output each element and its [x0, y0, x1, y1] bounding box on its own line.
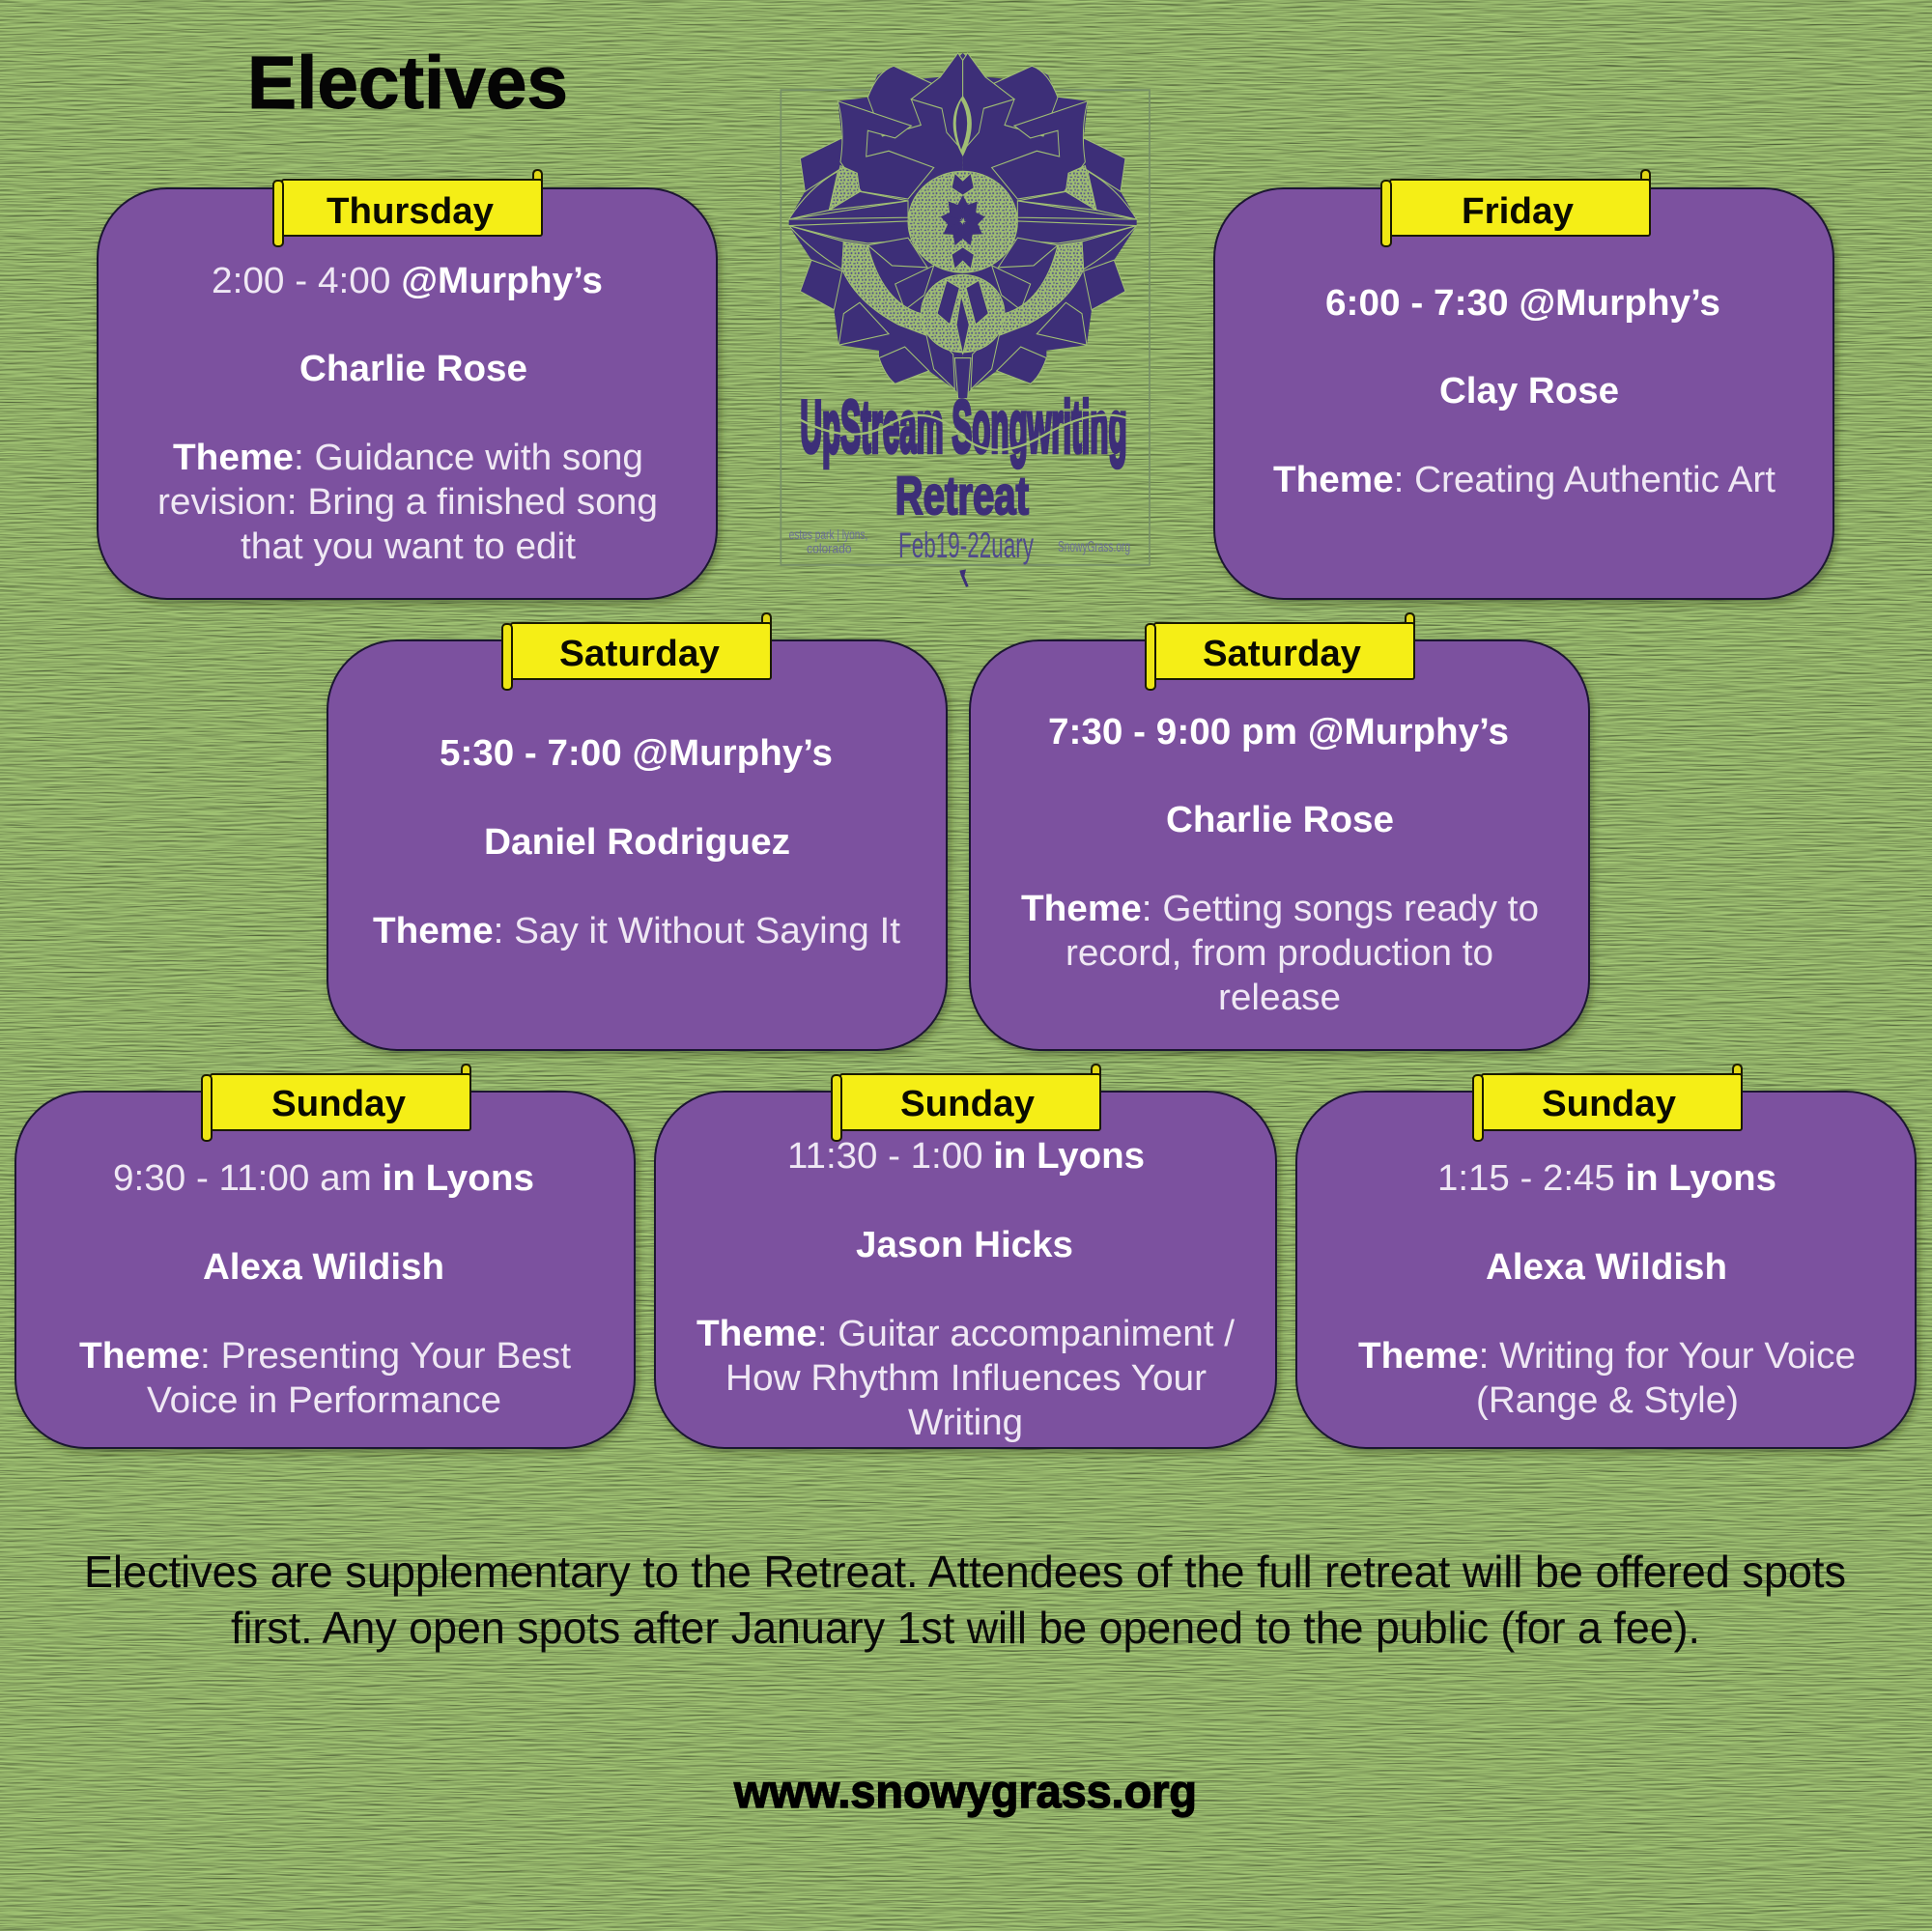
panel: Sunday 11:30: [655, 1065, 1276, 1448]
logo: UpStream Songwriting Retreat poster: colorado: [807, 541, 852, 556]
theme: Theme: Say it Without Saying It: [373, 911, 900, 951]
theme: Theme: Creating Authentic Art: [1273, 460, 1776, 500]
theme: How Rhythm Influences Your: [725, 1358, 1207, 1399]
theme: Theme: Writing for Your Voice: [1358, 1336, 1856, 1377]
theme: [79, 1336, 571, 1421]
instructor: Alexa Wildish: [1486, 1247, 1727, 1288]
tag: Saturday: Saturday: [559, 633, 721, 674]
note text: [84, 1547, 1846, 1653]
tag: Saturday: [1146, 613, 1414, 690]
instructor: Jason Hicks: [856, 1225, 1073, 1265]
theme: release: [1218, 978, 1341, 1018]
theme: record, from production to: [1065, 933, 1493, 974]
theme: Theme: Presenting Your Best: [79, 1336, 571, 1377]
theme: [1021, 889, 1539, 1018]
instructor: Charlie Rose: [1166, 800, 1394, 840]
logo: UpStream Songwriting Retreat poster: Retreat: [895, 467, 1029, 526]
theme: [696, 1314, 1235, 1443]
tag: Thursday: Thursday: [327, 190, 495, 232]
theme: Theme: Getting songs ready to: [1021, 889, 1539, 929]
time: 11:30 - 1:00 in Lyons: [787, 1136, 1145, 1177]
theme: [1358, 1336, 1856, 1421]
instructor: Alexa Wildish: [203, 1247, 444, 1288]
time: 2:00 - 4:00 @Murphy’s: [212, 261, 603, 301]
time: 9:30 - 11:00 am in Lyons: [113, 1158, 534, 1199]
theme: Voice in Performance: [147, 1380, 501, 1421]
theme: that you want to edit: [241, 526, 576, 567]
website url: www.snowygrass.org: [733, 1767, 1197, 1818]
panel: Friday: [1214, 170, 1833, 599]
instructor: Daniel Rodriguez: [484, 822, 790, 863]
instructor: Clay Rose: [1439, 371, 1619, 412]
tag: Thursday: [273, 170, 542, 246]
logo: UpStream Songwriting Retreat poster: Feb19-22uary: [898, 526, 1035, 566]
tag: Friday: [1381, 170, 1650, 246]
tag: Saturday: [502, 613, 771, 690]
note text: first. Any open spots after January 1st will be opened to the public (for a fee).: [231, 1603, 1700, 1653]
theme: (Range & Style): [1476, 1380, 1739, 1421]
panel: Saturday 5:30: [327, 613, 947, 1050]
logo: UpStream Songwriting Retreat poster: [781, 52, 1151, 587]
panel: Thursday: [98, 170, 717, 599]
time: 5:30 - 7:00 @Murphy’s: [440, 733, 833, 774]
note text: Electives are supplementary to the Retreat. Attendees of the full retreat will be offered spots: [84, 1547, 1846, 1597]
time: 6:00 - 7:30 @Murphy’s: [1325, 283, 1720, 324]
instructor: Charlie Rose: [299, 349, 527, 389]
panel: Sunday 1:15: [1296, 1065, 1916, 1448]
tag: Sunday: Sunday: [900, 1083, 1036, 1124]
logo: UpStream Songwriting Retreat poster: estes park | lyons,: [789, 526, 867, 542]
time: 7:30 - 9:00 pm @Murphy’s: [1048, 712, 1509, 753]
theme: revision: Bring a finished song: [157, 482, 658, 523]
theme: Writing: [908, 1403, 1023, 1443]
tag: Friday: Friday: [1462, 190, 1575, 232]
tag: Sunday: [1473, 1065, 1742, 1141]
panel: Sunday 9:30: [15, 1065, 635, 1448]
tag: Sunday: [832, 1065, 1100, 1141]
tag: Sunday: Sunday: [271, 1083, 407, 1124]
theme: [157, 438, 658, 567]
tag: Sunday: [202, 1065, 470, 1141]
tag: Saturday: Saturday: [1203, 633, 1362, 674]
theme: Theme: Guidance with song: [173, 438, 643, 478]
tag: Sunday: Sunday: [1542, 1083, 1677, 1124]
panel: Saturday 7:30: [970, 613, 1589, 1050]
theme: Theme: Guitar accompaniment /: [696, 1314, 1235, 1354]
time: 1:15 - 2:45 in Lyons: [1437, 1158, 1776, 1199]
title: Electives: [247, 43, 568, 125]
